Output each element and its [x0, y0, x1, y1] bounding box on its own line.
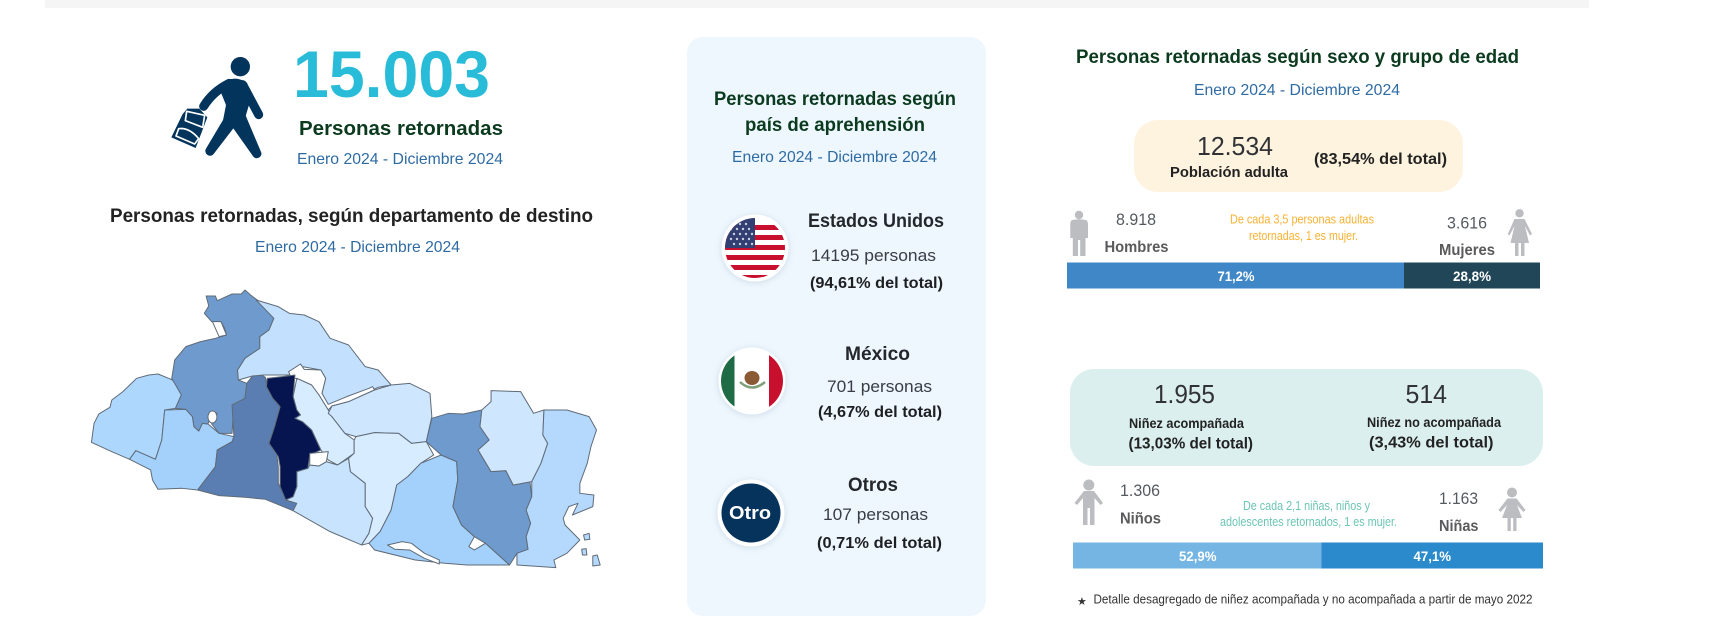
date range: Enero 2024 - Diciembre 2024	[297, 151, 503, 168]
men count: 8.918	[1116, 211, 1156, 229]
girls label: Niñas	[1439, 518, 1478, 535]
icon: other countries badge: Otro	[729, 503, 771, 523]
unaccompanied share: (3,43% del total)	[1369, 434, 1494, 452]
persons: Estados Unidos: 14195 personas	[811, 246, 936, 265]
icon: Mexican flag	[718, 348, 786, 414]
panel heading: Personas retornadas según	[714, 89, 956, 110]
icon: boy	[1074, 480, 1103, 525]
persons: Otros: 107 personas	[823, 505, 928, 524]
icon: walking person with backpack	[171, 57, 261, 158]
icon: girl	[1498, 488, 1526, 531]
children ratio note	[1220, 499, 1397, 529]
adult share: (83,54% del total)	[1314, 151, 1447, 168]
adult ratio note: retornadas, 1 es mujer.	[1249, 229, 1358, 243]
panel date range: Enero 2024 - Diciembre 2024	[732, 149, 937, 166]
panel: adult population	[1134, 120, 1463, 192]
country: México: México	[845, 344, 910, 365]
adult total: 12.534	[1197, 131, 1273, 161]
stacked bar: adults by sex: 28,8%	[1453, 268, 1492, 284]
children ratio note: adolescentes retornados, 1 es mujer.	[1220, 515, 1397, 529]
total number: 15.003	[293, 37, 490, 111]
country: Estados Unidos: Estados Unidos	[808, 211, 944, 232]
share: Otros: (0,71% del total)	[817, 535, 942, 552]
top bar	[45, 0, 1589, 8]
persons: México: 701 personas	[827, 377, 932, 396]
adult ratio note	[1230, 212, 1374, 243]
share: Estados Unidos: (94,61% del total)	[810, 275, 943, 292]
stacked bar: adults by sex	[1067, 262, 1540, 288]
heading: sex and age: Personas retornadas según sexo y grupo de edad	[1076, 47, 1519, 68]
boys count: 1.306	[1120, 482, 1160, 500]
stacked bar: adults by sex: 71,2%	[1218, 268, 1255, 284]
icon: man	[1070, 211, 1088, 256]
icon: woman	[1508, 209, 1532, 256]
adult ratio note: De cada 3,5 personas adultas	[1230, 212, 1374, 226]
unaccompanied label: Niñez no acompañada	[1367, 415, 1501, 430]
accompanied label: Niñez acompañada	[1129, 416, 1244, 431]
children ratio note: De cada 2,1 niñas, niños y	[1243, 499, 1371, 513]
women count: 3.616	[1447, 214, 1487, 232]
panel: children	[1070, 369, 1543, 466]
country: Otros: Otros	[848, 475, 898, 496]
girls count: 1.163	[1439, 490, 1478, 508]
unaccompanied total: 514	[1406, 379, 1447, 409]
panel heading line 2: país de aprehensión	[745, 115, 925, 136]
heading: map: Personas retornadas, según departamento de destino	[110, 206, 593, 227]
accompanied total: 1.955	[1154, 379, 1215, 409]
icon: other countries badge	[718, 480, 784, 546]
icon: US flag	[722, 214, 788, 282]
footnote: ★	[1077, 596, 1087, 608]
men label: Hombres	[1104, 239, 1168, 256]
panel: country of apprehension	[687, 37, 986, 616]
share: México: (4,67% del total)	[818, 404, 942, 421]
stacked bar: children by sex: 52,9%	[1179, 548, 1217, 564]
stacked bar: children by sex	[1073, 542, 1543, 568]
boys label: Niños	[1120, 510, 1161, 528]
accompanied share: (13,03% del total)	[1128, 436, 1253, 452]
adult label: Población adulta	[1170, 164, 1289, 181]
sex and age date range: Enero 2024 - Diciembre 2024	[1194, 82, 1400, 99]
women label: Mujeres	[1439, 242, 1495, 259]
map date range: Enero 2024 - Diciembre 2024	[255, 239, 460, 256]
footnote: Detalle desagregado de niñez acompañada y no acompañada a partir de mayo 2022	[1094, 592, 1533, 606]
stacked bar: children by sex: 47,1%	[1414, 548, 1452, 564]
heading: personas retornadas: Personas retornadas	[299, 118, 503, 140]
map: departments of El Salvador	[91, 290, 600, 568]
